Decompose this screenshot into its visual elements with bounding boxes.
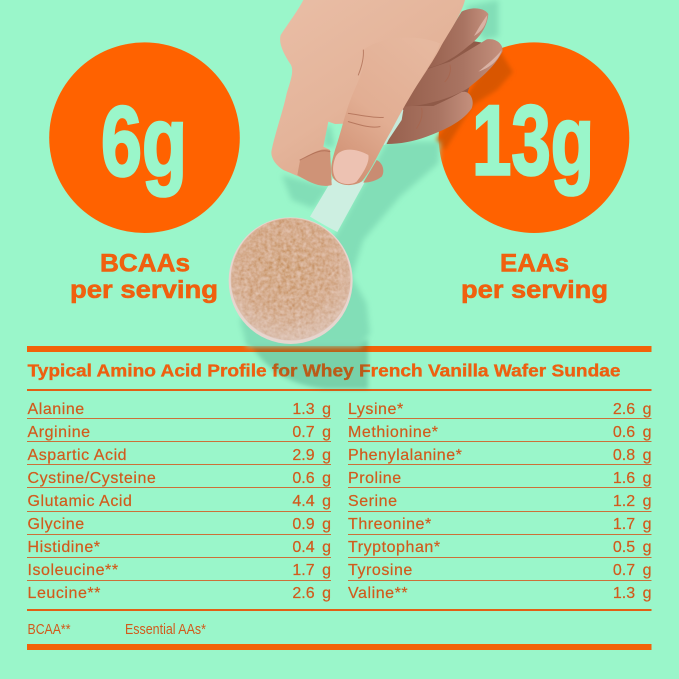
nutrition table (27, 346, 652, 650)
scoop shadow over table (248, 340, 368, 389)
row: Glutamic Acid (28, 493, 331, 510)
circle: 6g BCAAs (49, 42, 240, 233)
curled index fingertip shade (297, 149, 332, 186)
knuckle creases (300, 50, 450, 160)
row: Phenylalanine: 0.8 g (613, 447, 652, 464)
table title: Typical Amino Acid Profile for Whey French Vanilla Wafer Sundae (28, 361, 621, 381)
row: Arginine: Arginine (28, 424, 91, 441)
thumb (331, 38, 440, 185)
row: Phenylalanine (348, 447, 652, 464)
row: Tyrosine: 0.7 g (613, 562, 652, 579)
photo: hand holding scoop of powder (229, 0, 503, 347)
row: Leucine: Leucine** (28, 585, 101, 602)
scoop handle (310, 107, 403, 232)
row: Lysine: 2.6 g (613, 401, 652, 418)
row: Glycine: 0.9 g (292, 516, 331, 533)
row: Tyrosine: Tyrosine (348, 562, 413, 579)
row: Arginine (28, 424, 331, 441)
thumbnail (333, 150, 369, 184)
row: Threonine: Threonine* (348, 516, 432, 533)
row: Threonine (348, 516, 652, 533)
row: Leucine (28, 585, 331, 602)
row: Methionine (348, 424, 652, 441)
row: Cystine/Cysteine: 0.6 g (292, 470, 331, 487)
row: Histidine: Histidine* (28, 539, 101, 556)
row: Glutamic Acid: 4.4 g (292, 493, 331, 510)
footnote: BCAA: BCAA** (28, 621, 71, 638)
row: Proline: Proline (348, 470, 402, 487)
row: Glutamic Acid: Glutamic Acid (28, 493, 132, 510)
row: Glycine: Glycine (28, 516, 85, 533)
row: Isoleucine (28, 562, 331, 579)
row: Isoleucine: Isoleucine** (28, 562, 119, 579)
circle: 13g EAAs (436, 42, 629, 233)
table top bar (27, 346, 652, 352)
back of hand (271, 0, 465, 186)
row: Serine: 1.2 g (613, 493, 652, 510)
row: Lysine (348, 401, 652, 418)
heading: BCAAs per serving: per serving (70, 276, 218, 304)
row: Proline (348, 470, 652, 487)
row: Methionine: Methionine* (348, 424, 439, 441)
row: Arginine: 0.7 g (292, 424, 331, 441)
row: Tryptophan (348, 539, 652, 556)
powder scoop (229, 217, 353, 344)
finger 3 (387, 92, 473, 144)
row: Lysine: Lysine* (348, 401, 404, 418)
table bottom bar (27, 644, 652, 650)
row: Leucine: 2.6 g (292, 585, 331, 602)
row: Isoleucine: 1.7 g (292, 562, 331, 579)
row: Aspartic Acid: 2.9 g (292, 447, 331, 464)
heading: EAAs per serving: EAAs (500, 250, 569, 278)
row: Serine: Serine (348, 493, 398, 510)
fingernail highlights (474, 15, 502, 72)
fingertip behind thumb (363, 160, 383, 183)
row: Serine (348, 493, 652, 510)
row: Alanine: Alanine (28, 401, 85, 418)
row: Alanine: 1.3 g (292, 401, 331, 418)
row: Valine: 1.3 g (613, 585, 652, 602)
row: Phenylalanine: Phenylalanine* (348, 447, 462, 464)
row: Proline: 1.6 g (613, 470, 652, 487)
row: Cystine/Cysteine (28, 470, 331, 487)
row: Histidine: 0.4 g (292, 539, 331, 556)
row: Methionine: 0.6 g (613, 424, 652, 441)
row: Alanine (28, 401, 331, 418)
row: Tyrosine (348, 562, 652, 579)
hand and scoop shadows (240, 0, 498, 347)
row: Threonine: 1.7 g (613, 516, 652, 533)
row: Valine (348, 585, 652, 602)
row: Glycine (28, 516, 331, 533)
right column rows (348, 401, 652, 602)
circle: 6g BCAAs: 6g (101, 86, 187, 196)
heading: EAAs per serving: per serving (461, 276, 608, 304)
row: Aspartic Acid (28, 447, 331, 464)
footnote: Essential AAs: Essential AAs* (125, 621, 206, 638)
row: Tryptophan: 0.5 g (613, 539, 652, 556)
heading: BCAAs per serving: BCAAs (100, 250, 190, 278)
circle: 13g EAAs: 13g (472, 84, 594, 196)
left column rows (27, 401, 331, 602)
row: Valine: Valine** (348, 585, 408, 602)
finger 1 (427, 8, 488, 68)
row: Tryptophan: Tryptophan* (348, 539, 441, 556)
finger 2 (403, 39, 503, 107)
heading: BCAAs per serving (70, 250, 218, 304)
row: Aspartic Acid: Aspartic Acid (28, 447, 127, 464)
heading: EAAs per serving (461, 250, 608, 304)
finger base shade (407, 40, 487, 107)
row: Histidine (28, 539, 331, 556)
row: Cystine/Cysteine: Cystine/Cysteine (28, 470, 156, 487)
